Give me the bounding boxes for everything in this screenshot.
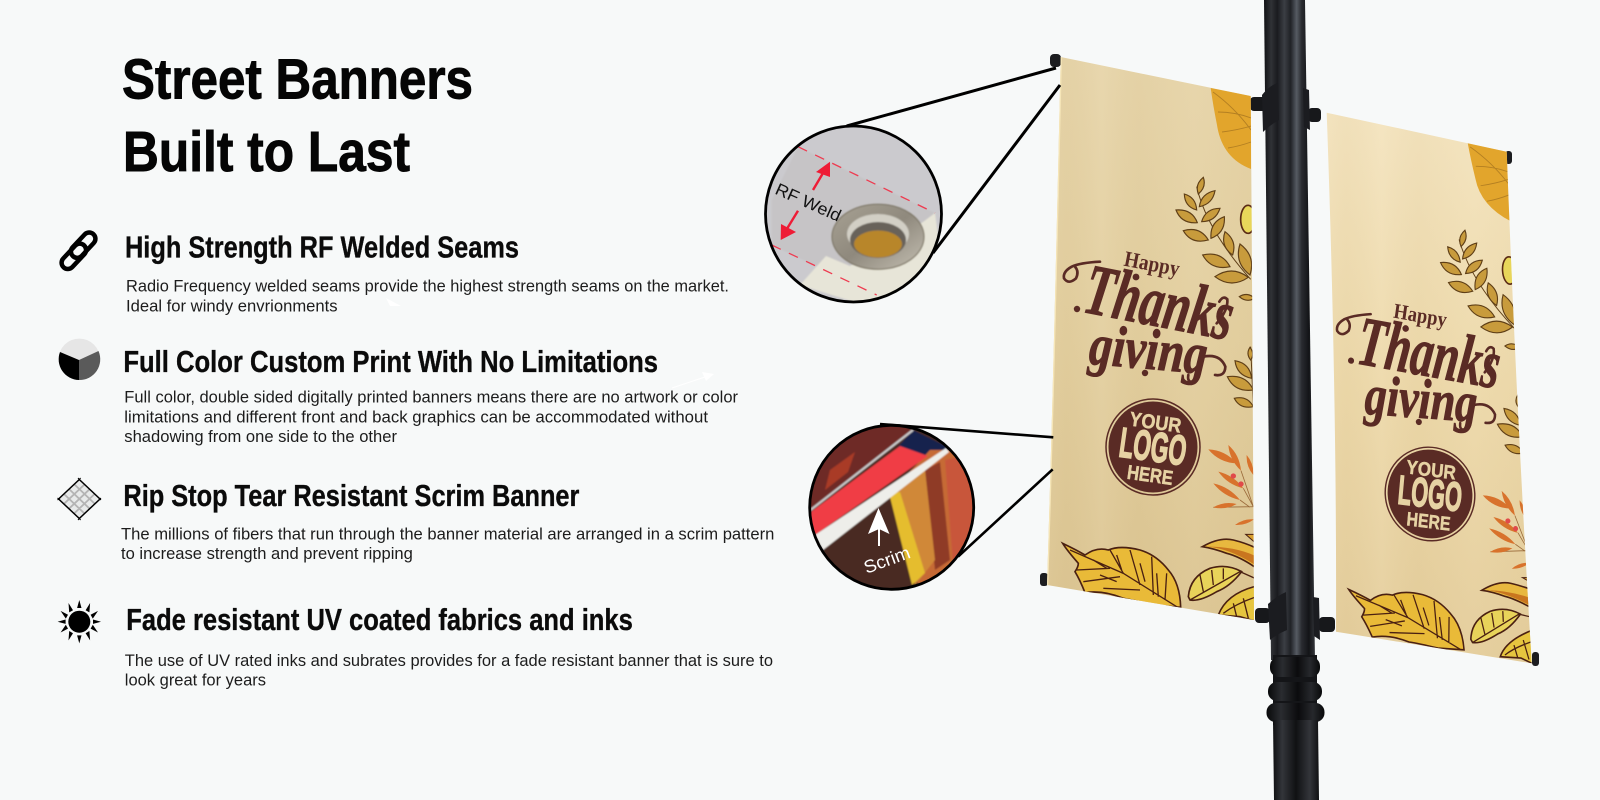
banner 2 orange sprig: [1483, 490, 1530, 569]
lens ring: [766, 126, 942, 302]
feature 1: RF welded seams: [125, 230, 729, 316]
banner 2 logo badge: HERE: [1406, 509, 1451, 536]
feature 3: rip stop: [121, 478, 774, 563]
red stitch lines: [772, 147, 935, 295]
banner 2 artwork: [1336, 143, 1532, 664]
banner 2 logo badge: [1383, 446, 1477, 542]
grommet: [832, 204, 924, 269]
banner 1 top orange leaf: [1211, 88, 1251, 169]
feature 4: UV fade resistance: The use of UV rated inks and subrates provides for a fade resistant banner that is sure to: [125, 652, 773, 670]
photo: navy corner: [898, 430, 947, 456]
lower shaft: [1273, 720, 1319, 800]
banner 1 bottom leaves: [1063, 534, 1257, 622]
street pole: [1250, 0, 1335, 800]
icon: sun: [58, 600, 101, 643]
photo: orange fabric: [909, 448, 956, 584]
feature 2: full colour print: Full color, double sided digitally printed banners means there are no artwork or color: [124, 389, 739, 407]
banner 1 hardware knobs: [1040, 54, 1061, 586]
title: Street Banners: [122, 48, 473, 112]
banner 1 greeting: giving: [1085, 312, 1210, 387]
white arrow: [868, 508, 890, 546]
banner 2 hardware knobs: [1505, 151, 1539, 666]
banner 2 logo badge: LOGO: [1396, 466, 1464, 521]
feature 4: UV fade resistance: look great for years: [125, 672, 266, 690]
photo: white band: [815, 448, 949, 550]
feature 3: rip stop: Rip Stop Tear Resistant Scrim Banner: [123, 478, 579, 513]
callout leader lines: scrim: [880, 424, 1053, 557]
banner 1 greeting: Thanks: [1078, 249, 1241, 356]
banner 1 fabric: [1040, 50, 1260, 630]
icon: scrim diamond: [58, 478, 101, 520]
icon: chain link: [59, 230, 98, 272]
banner 2: [1326, 112, 1532, 664]
icon: colour wheel: [59, 339, 100, 380]
feature 2: full colour print: Full Color Custom Print With No Limitations: [123, 344, 658, 379]
banner 1 fern sprigs: [1176, 177, 1255, 407]
stray white arrows: [386, 298, 714, 388]
banner 2 greeting: Thanks: [1353, 302, 1505, 405]
feature 4: UV fade resistance: Fade resistant UV coated fabrics and inks: [126, 602, 633, 637]
banner 2 greeting: [1336, 304, 1500, 434]
banner 1 orange sprig: [1208, 445, 1254, 525]
callout leader lines: RF weld: [847, 68, 1060, 253]
lower clamps: [1268, 592, 1320, 640]
flared base rings: [1266, 657, 1324, 722]
lens ring: [810, 425, 974, 589]
feature 2: full colour print: [123, 344, 739, 446]
banner 2 greeting: Happy: [1392, 299, 1449, 332]
banner 2 fabric: [1320, 105, 1540, 670]
feature 4: UV fade resistance: [125, 602, 773, 690]
banner 2 logo badge: YOUR: [1405, 457, 1457, 485]
bracket arms: [1250, 97, 1335, 632]
banner 2 fern sprigs: [1439, 229, 1526, 455]
banner 1 greeting: [1064, 246, 1241, 387]
photo: yellow stripe: [889, 492, 925, 585]
callout: RF weld detail: [764, 124, 943, 304]
banner 1 logo badge: YOUR: [1128, 409, 1183, 438]
RF Weld label: RF Weld: [772, 180, 844, 225]
banner 2 top orange leaf: [1468, 143, 1510, 220]
banner 1: [1040, 50, 1260, 630]
photo: dark red fabric: [811, 426, 911, 508]
upper shaft: [1264, 0, 1315, 660]
title: [122, 48, 473, 184]
Scrim label: Scrim: [861, 542, 913, 578]
feature 1: RF welded seams: High Strength RF Welded Seams: [125, 230, 519, 265]
upper clamps: [1262, 83, 1310, 132]
base neck: [1273, 655, 1317, 725]
banner 2 greeting: giving: [1362, 364, 1478, 435]
feature 2: full colour print: shadowing from one side to the other: [124, 428, 397, 446]
banner 1 logo badge: LOGO: [1117, 419, 1190, 474]
title: Built to Last: [123, 120, 410, 184]
red arrows: [781, 162, 830, 240]
feature 2: full colour print: limitations and different front and back graphics can be accommodated without: [124, 408, 708, 426]
feature 1: RF welded seams: Radio Frequency welded seams provide the highest strength seams on the market.: [126, 278, 729, 296]
feature 3: rip stop: The millions of fibers that run through the banner material are arranged in a scrim pattern: [121, 525, 774, 543]
callout: scrim detail: [808, 424, 976, 591]
photo base: [811, 428, 949, 588]
feature 3: rip stop: to increase strength and prevent ripping: [121, 545, 413, 563]
photo: vinyl surface and hem: [766, 127, 940, 300]
banner 1 logo badge: HERE: [1126, 462, 1174, 490]
photo: red band: [800, 446, 928, 535]
banner 1 logo badge: [1106, 399, 1200, 495]
banner 1 greeting: Happy: [1122, 246, 1182, 281]
feature 1: RF welded seams: Ideal for windy envrionments: [126, 298, 338, 316]
banner 2 bottom leaves: [1346, 577, 1532, 664]
